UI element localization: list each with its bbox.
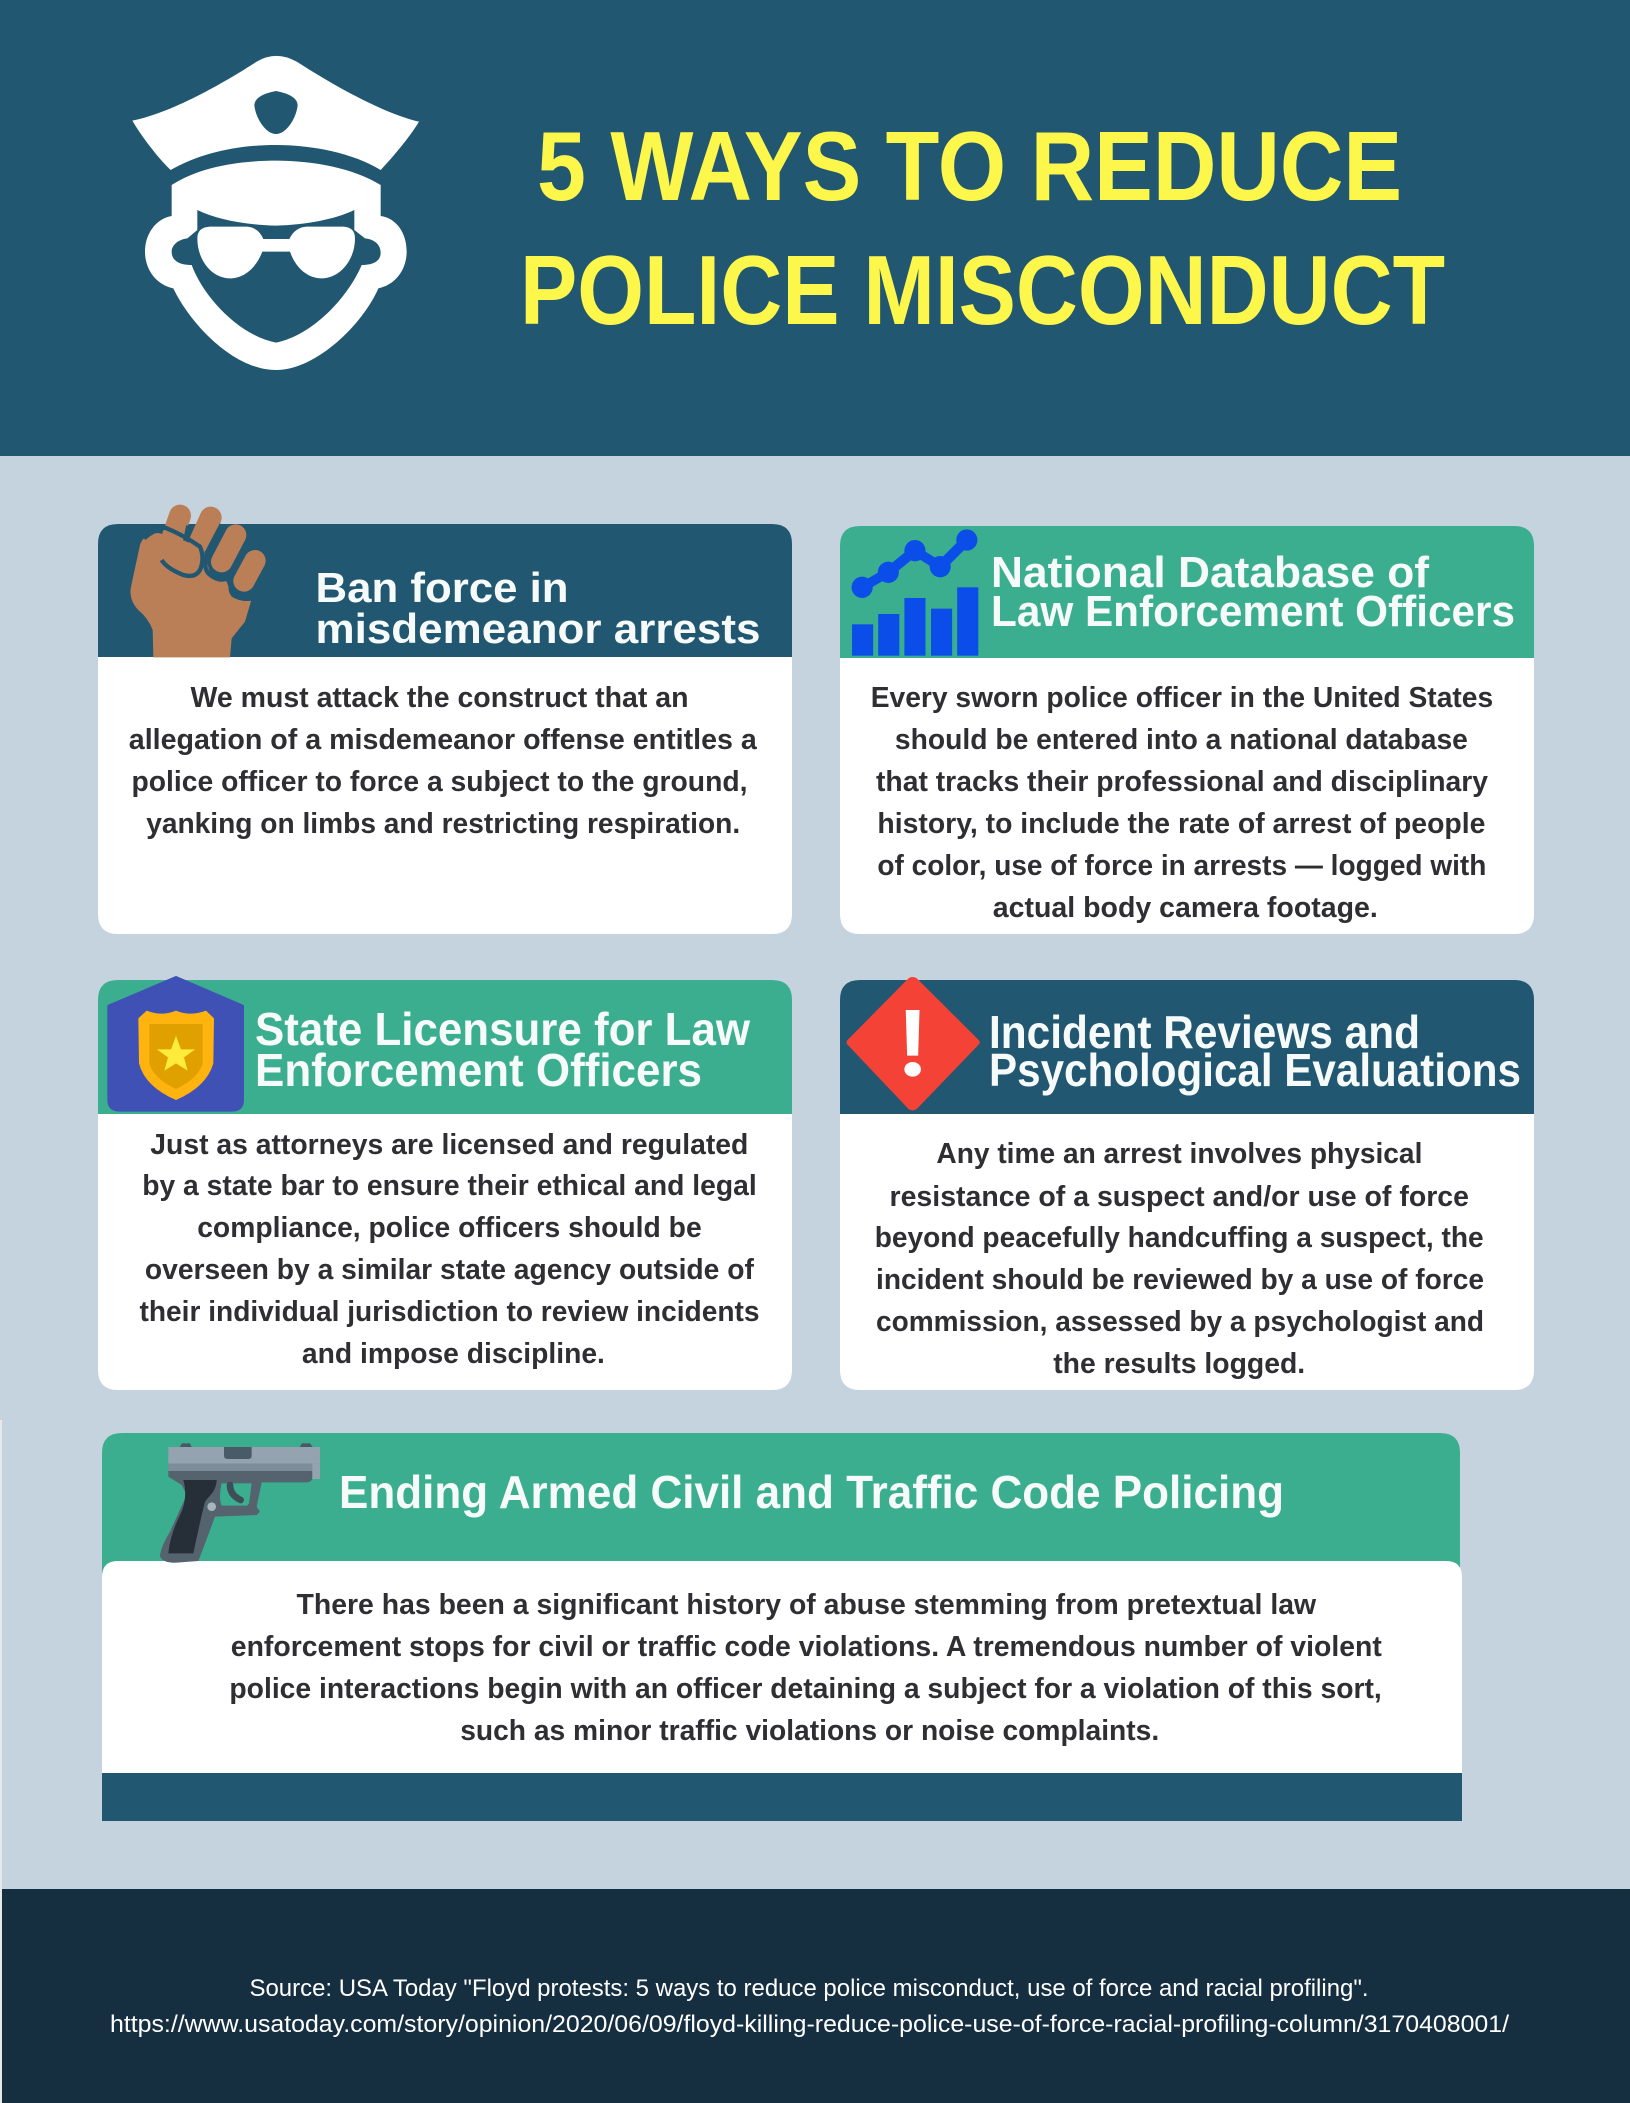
- body text: [871, 682, 1493, 924]
- body text: Any time an arrest involves physical: [936, 1138, 1422, 1170]
- heading: Psychological Evaluations: [989, 1044, 1521, 1096]
- body text: [229, 1589, 1382, 1747]
- body text: allegation of a misdemeanor offense entitles a: [129, 724, 758, 756]
- heading: National Database of: [991, 548, 1429, 597]
- panel: incident reviews and psychological evaluations: [840, 980, 1534, 1390]
- heading: Law Enforcement Officers: [991, 587, 1515, 636]
- body text: should be entered into a national database: [895, 724, 1468, 756]
- body text: [129, 682, 758, 840]
- body text: by a state bar to ensure their ethical and legal: [142, 1170, 757, 1202]
- body text: actual body camera footage.: [993, 892, 1378, 924]
- body text: overseen by a similar state agency outside of: [145, 1254, 754, 1286]
- body text: Just as attorneys are licensed and regulated: [150, 1129, 748, 1161]
- body text: enforcement stops for civil or traffic code violations. A tremendous number of violent: [231, 1631, 1382, 1663]
- body text: history, to include the rate of arrest of people: [877, 808, 1485, 840]
- title: POLICE MISCONDUCT: [520, 235, 1445, 345]
- body text: compliance, police officers should be: [197, 1212, 702, 1244]
- body text: such as minor traffic violations or noise complaints.: [460, 1715, 1159, 1747]
- body text: yanking on limbs and restricting respiration.: [146, 808, 740, 840]
- body text: and impose discipline.: [302, 1338, 605, 1370]
- footer band: [2, 1889, 1630, 2103]
- body text: resistance of a suspect and/or use of force: [890, 1181, 1469, 1213]
- panel: state licensure for law enforcement officers: [98, 977, 792, 1390]
- body text: police officer to force a subject to the ground,: [132, 766, 748, 798]
- heading: Ban force in: [316, 564, 568, 611]
- body text: that tracks their professional and disciplinary: [876, 766, 1488, 798]
- source text: [110, 1975, 1509, 2038]
- title: 5 WAYS TO REDUCE: [537, 111, 1402, 221]
- body text: [875, 1138, 1484, 1380]
- body text: Every sworn police officer in the United States: [871, 682, 1493, 714]
- body text: of color, use of force in arrests — logged with: [877, 850, 1486, 882]
- heading: Incident Reviews and: [989, 1006, 1420, 1058]
- source text: https://www.usatoday.com/story/opinion/2020/06/09/floyd-killing-reduce-police-use-of-force-racial-profiling-column/3170408001/: [110, 2011, 1509, 2038]
- heading: [255, 1003, 750, 1096]
- title: [520, 111, 1445, 345]
- icon: bar and line chart: [852, 529, 978, 656]
- panel: national database of law enforcement officers: [840, 526, 1534, 934]
- icon: handgun: [160, 1443, 320, 1563]
- header banner: [0, 0, 1630, 456]
- body text: commission, assessed by a psychologist and: [876, 1306, 1484, 1338]
- body text: beyond peacefully handcuffing a suspect, the: [875, 1222, 1484, 1254]
- heading: [989, 1006, 1521, 1096]
- icon: police badge: [109, 977, 243, 1110]
- heading: Enforcement Officers: [255, 1044, 702, 1096]
- body text: [140, 1129, 760, 1370]
- icon: warning diamond: [852, 981, 974, 1106]
- body text: police interactions begin with an officer detaining a subject for a violation of this sort,: [229, 1673, 1382, 1705]
- body text: We must attack the construct that an: [190, 682, 688, 714]
- body text: There has been a significant history of abuse stemming from pretextual law: [296, 1589, 1317, 1621]
- body text: the results logged.: [1053, 1348, 1305, 1380]
- heading: [316, 564, 760, 652]
- heading: misdemeanor arrests: [316, 605, 760, 652]
- panel: ending armed civil and traffic code policing: [102, 1433, 1462, 1821]
- body text: their individual jurisdiction to review incidents: [140, 1296, 760, 1328]
- icon: police officer head: [132, 56, 419, 370]
- heading: Ending Armed Civil and Traffic Code Policing: [339, 1466, 1284, 1518]
- heading: State Licensure for Law: [255, 1003, 750, 1055]
- icon: raised fist: [130, 516, 255, 657]
- source text: Source: USA Today "Floyd protests: 5 ways to reduce police misconduct, use of force and racial profiling".: [250, 1975, 1368, 2002]
- heading: [991, 548, 1515, 636]
- body text: incident should be reviewed by a use of force: [876, 1264, 1484, 1296]
- panel: ban force in misdemeanor arrests: [98, 516, 792, 934]
